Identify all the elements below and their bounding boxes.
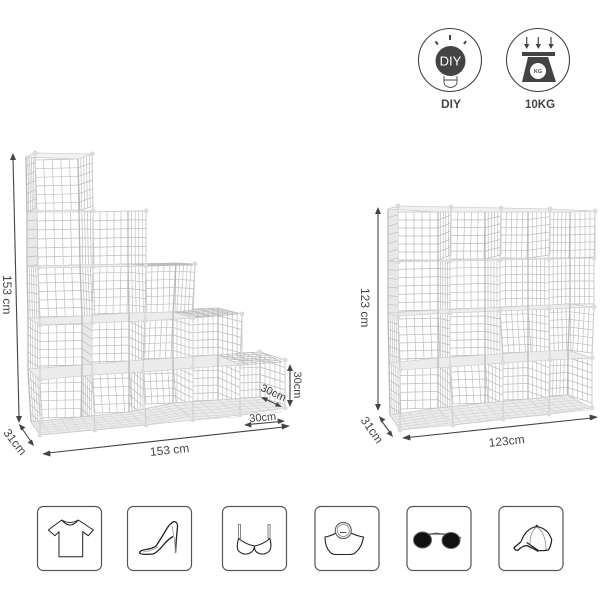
dimension label: 31cm depth: 31cm xyxy=(0,426,30,458)
dimension label: 30cm width: 30cm xyxy=(249,411,277,425)
dimension arrow: cube height 30cm xyxy=(287,364,293,407)
square shelf rear posts xyxy=(388,209,570,415)
square shelf back panels xyxy=(398,212,571,409)
dimension label: 31cm depth: 31cm xyxy=(358,414,386,446)
icon: DIY light bulb xyxy=(418,28,482,92)
square shelf connector nodes xyxy=(398,206,595,430)
label: DIY: DIY xyxy=(441,97,461,111)
staircase open top meshes xyxy=(26,153,282,365)
staircase wire cube shelf xyxy=(26,153,285,435)
square shelf floor mesh xyxy=(390,395,589,430)
square shelf front posts xyxy=(398,206,595,430)
dimension label: 123 cm height: 123 cm xyxy=(358,288,372,327)
staircase floor mesh xyxy=(31,397,282,435)
icon: 10KG weight scale: KG xyxy=(534,69,542,75)
staircase shelves xyxy=(26,153,285,435)
dimension label: 153 cm width: 153 cm xyxy=(149,441,190,459)
icon box: bra xyxy=(222,506,286,570)
dimension arrow: square shelf depth xyxy=(379,416,393,437)
staircase back panels xyxy=(35,159,260,418)
dimension label: 153 cm height: 153 cm xyxy=(0,275,14,314)
dimension arrow: cube width 30cm xyxy=(244,418,285,428)
icon box: high heel xyxy=(128,506,192,570)
icon: DIY light bulb: DIY xyxy=(440,54,462,68)
dimension arrow: staircase width xyxy=(42,424,290,456)
dimension arrow: square shelf width xyxy=(402,414,598,440)
dimension label: 30cm depth: 30cm xyxy=(258,382,288,404)
square wire cube shelf xyxy=(388,206,595,430)
dimension label: 30cm height: 30cm xyxy=(291,372,303,398)
icon box: sunglasses xyxy=(407,506,471,570)
square shelf side panels xyxy=(388,206,595,422)
icon box: t-shirt xyxy=(38,506,102,570)
dimension label: 123cm width: 123cm xyxy=(488,432,525,450)
icon box: handbag xyxy=(315,506,379,570)
square shelf shelves xyxy=(388,206,595,430)
label: 10KG: 10KG xyxy=(525,99,555,111)
icon box: baseball cap xyxy=(499,506,563,570)
staircase rear posts xyxy=(26,157,260,422)
dimension arrow: staircase height xyxy=(10,153,22,423)
staircase connector nodes xyxy=(35,153,285,435)
staircase side panels xyxy=(26,153,285,433)
dimension arrow: staircase depth xyxy=(19,424,34,446)
staircase front posts xyxy=(35,153,285,435)
dimension arrow: square shelf height xyxy=(375,207,381,411)
dimension arrow: cube depth 30cm xyxy=(261,397,282,407)
icon: 10KG weight scale xyxy=(506,28,570,92)
